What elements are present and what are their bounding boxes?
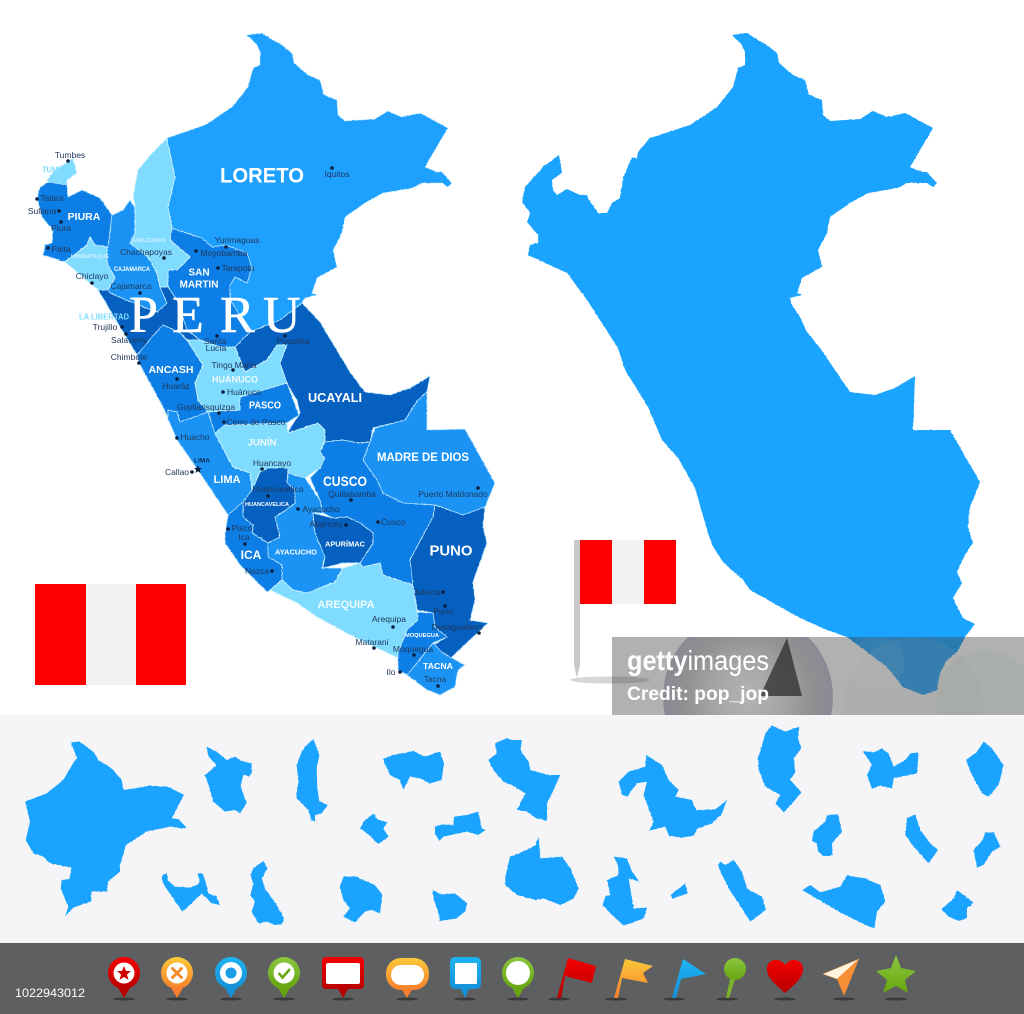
city names and markers: Sullana: [28, 206, 56, 216]
city names and markers: Ilo: [387, 667, 396, 677]
region labels: TACNA: [423, 661, 453, 671]
city names and markers: Chimbote: [111, 352, 147, 362]
city names and markers: Arequipa: [372, 614, 406, 624]
city names and markers: Moyobamba: [201, 248, 248, 258]
region: Arequipa: [270, 563, 418, 658]
city names and markers: Huánuco: [227, 387, 261, 397]
region: Apurimac: [313, 513, 373, 568]
city names and markers: Juliaca: [414, 587, 440, 597]
region: Lima: [163, 407, 252, 515]
flag: Peru on pole: [570, 540, 676, 684]
region labels: MADRE DE DIOS: [377, 452, 469, 464]
city names and markers: Iquitos: [324, 169, 350, 179]
city names and markers: [28, 150, 488, 688]
city names and markers: Cusco: [381, 517, 405, 527]
icon: green star: [876, 955, 916, 993]
region labels: [42, 164, 473, 671]
city names and markers: Yurimaguas: [215, 235, 259, 245]
map: Peru regions with labels: [28, 33, 495, 695]
region: San Martin: [168, 228, 252, 347]
region: Huancavelica: [243, 468, 295, 543]
panel: individual regions: [0, 715, 1024, 943]
city names and markers: Lucía: [206, 343, 227, 353]
city names and markers: Callao: [165, 467, 189, 477]
region labels: ANCASH: [149, 364, 193, 376]
region: Madre de Dios: [363, 392, 495, 515]
city names and markers: Moquegua: [393, 644, 433, 654]
region labels: PASCO: [249, 400, 281, 412]
region labels: AYACUCHO: [275, 550, 318, 556]
region: Moquegua: [398, 612, 447, 675]
city names and markers: Puno: [433, 606, 453, 616]
region labels: PUNO: [430, 542, 473, 560]
title: PERU: PERU: [129, 287, 301, 344]
city names and markers: Huacho: [180, 432, 210, 442]
region labels: LORETO: [220, 164, 304, 188]
city names and markers: Pisco: [232, 523, 253, 533]
region: Tumbes: [47, 158, 77, 185]
icon: green check pin: [268, 957, 300, 998]
icon: red flag: [557, 958, 596, 998]
region labels: HUÁNUCO: [212, 374, 258, 386]
city names and markers: Nazca: [245, 566, 269, 576]
watermark: gettyimages credit: Credit: pop_jop: [627, 684, 769, 705]
map: Peru silhouette: [522, 33, 980, 695]
city names and markers: Paita: [51, 244, 71, 254]
flag: Peru rectangular: [35, 584, 186, 685]
city names and markers: Salaverry: [111, 335, 148, 345]
city names and markers: Huaráz: [162, 381, 190, 391]
region labels: LIMA: [194, 458, 210, 464]
icon: blue ring pin: [215, 957, 247, 998]
city names and markers: Chiclayo: [76, 271, 109, 281]
icon: blue flag: [672, 959, 706, 998]
icon: orange flag: [614, 959, 653, 998]
city names and markers: Huancayo: [253, 458, 291, 468]
city names and markers: Tumbes: [55, 150, 85, 160]
region: Piura: [37, 182, 112, 262]
region: Junin: [215, 423, 325, 490]
city names and markers: Pucallpa: [277, 336, 310, 346]
city names and markers: Puerto Maldonado: [418, 489, 488, 499]
region: Loreto: [167, 33, 452, 332]
city names and markers: Trujillo: [93, 322, 118, 332]
region: Puno: [410, 505, 488, 657]
icon: blue square marker: [450, 957, 481, 998]
region: Pasco: [208, 383, 299, 433]
region: Cajamarca: [107, 200, 167, 312]
image id: 1022943012: [15, 988, 85, 1000]
region: Ayacucho: [268, 473, 343, 593]
watermark: gettyimages credit: gettyimages: [627, 645, 769, 676]
icon: red rectangle marker: [322, 957, 364, 998]
icon: green ring pin: [502, 957, 534, 998]
city names and markers: Quillabamba: [328, 489, 376, 499]
region labels: LAMBAYEQUE: [71, 254, 110, 260]
region labels: ICA: [241, 548, 262, 562]
region labels: AMAZONAS: [132, 238, 166, 244]
region labels: HUANCAVELICA: [245, 502, 289, 508]
city names and markers: Tacna: [424, 674, 447, 684]
region: Amazonas: [130, 138, 190, 287]
icon: orange bubble marker: [386, 958, 429, 998]
region labels: MOQUEGUA: [405, 633, 439, 639]
region: Lambayeque: [65, 237, 115, 290]
city names and markers: Tarapoto: [221, 263, 255, 273]
city names and markers: Talara: [40, 193, 64, 203]
city names and markers: Chachapoyas: [120, 247, 172, 257]
region: La Libertad: [98, 287, 200, 355]
region labels: AREQUIPA: [318, 599, 375, 611]
city names and markers: Cerro de Pasco: [226, 417, 286, 427]
icon: red heart: [767, 960, 803, 993]
city names and markers: Piura: [51, 223, 71, 233]
city names and markers: Huancavelica: [252, 484, 304, 494]
region labels: JUNÍN: [248, 438, 277, 448]
city names and markers: Santa: [204, 336, 226, 346]
region labels: UCAYALI: [308, 391, 362, 405]
region labels: CAJAMARCA: [114, 267, 151, 273]
city names and markers: Cajamarca: [110, 281, 152, 291]
city names and markers: Matarani: [355, 637, 389, 647]
region labels: LIMA: [214, 474, 241, 486]
toolbar: icon strip: [0, 943, 1024, 1014]
region labels: SAN: [188, 268, 210, 278]
watermark: gettyimages credit: [612, 637, 1024, 715]
region labels: PIURA: [68, 211, 101, 223]
city names and markers: Abancay: [309, 519, 343, 529]
city names and markers: Ica: [238, 532, 250, 542]
region labels: APURÍMAC: [325, 540, 365, 548]
icon: red star pin: [108, 957, 140, 998]
regions: [37, 33, 495, 695]
city names and markers: Desaguadero: [431, 622, 483, 632]
city names and markers: Tingo María: [211, 360, 257, 370]
region: Huanuco: [187, 340, 287, 412]
region labels: MARTIN: [180, 280, 218, 290]
region: Tacna: [407, 643, 465, 695]
icon: navigation arrow: [823, 959, 859, 996]
icon shadows: [113, 998, 907, 1000]
region: Ancash: [137, 325, 208, 422]
region labels: TUMBES: [42, 166, 75, 174]
city names and markers: Ayacucho: [302, 504, 340, 514]
region labels: CUSCO: [323, 473, 367, 489]
city names and markers: Goyllarisquizga: [177, 402, 235, 412]
icon: green pushpin: [724, 958, 746, 998]
icon: orange cross pin: [161, 957, 193, 998]
region: Cusco: [310, 440, 435, 585]
region labels: LA LIBERTAD: [79, 312, 129, 322]
region: Ica: [225, 502, 282, 592]
region: Ucayali: [235, 303, 430, 443]
